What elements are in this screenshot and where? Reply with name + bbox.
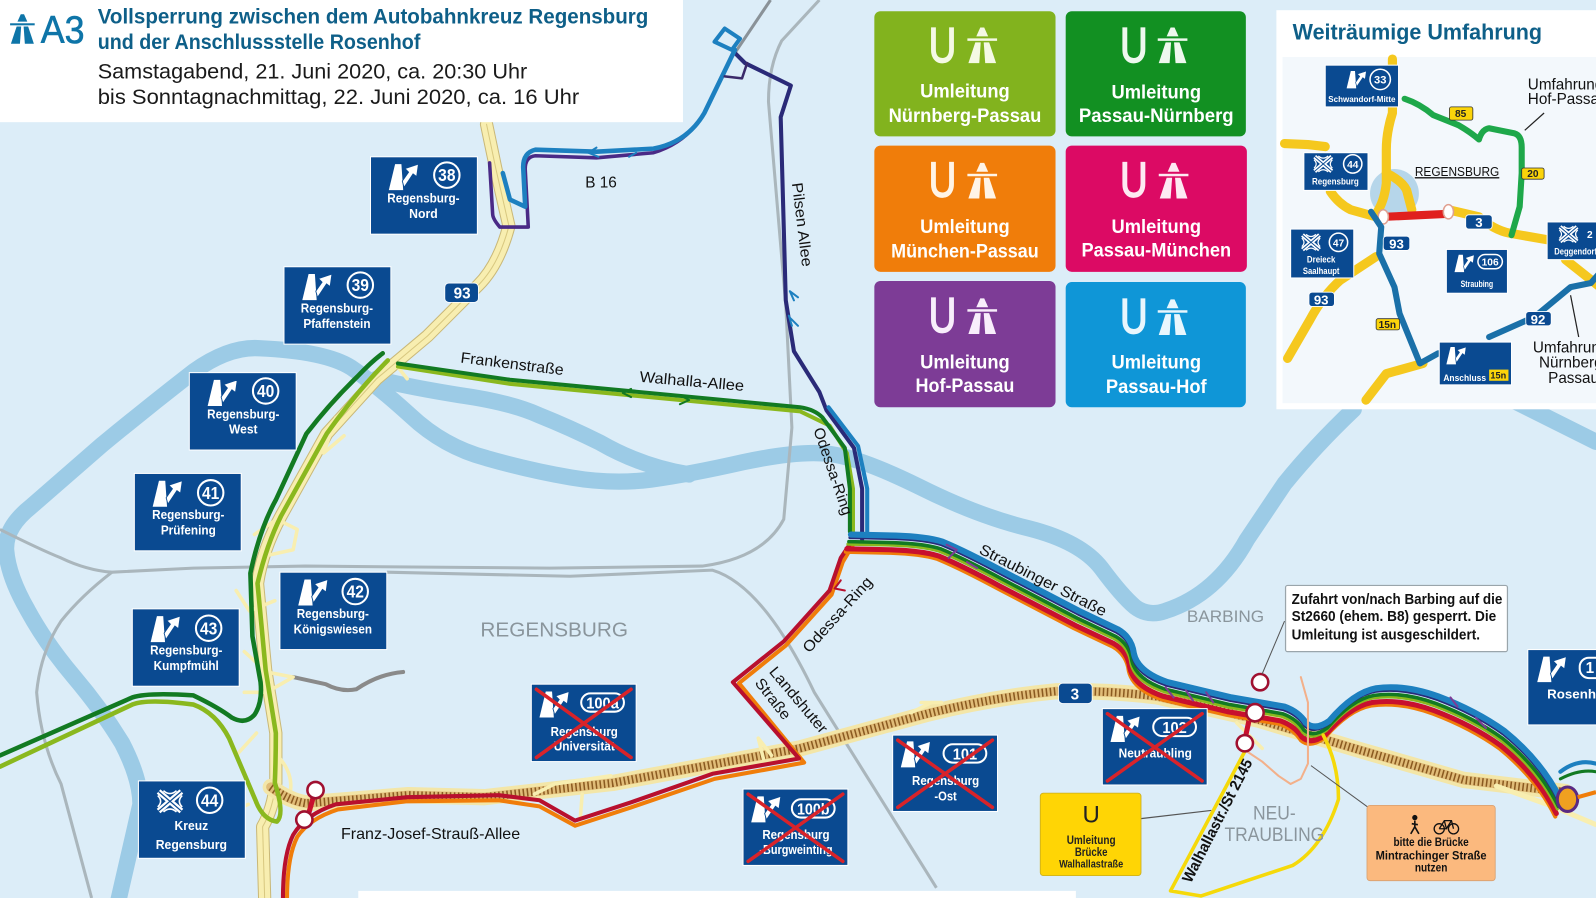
river Danube — [6, 348, 1596, 898]
route: Hof-Passau and Passau-Hof north section — [490, 29, 867, 540]
exit sign 39: Pfaffenstein — [303, 316, 370, 331]
interchange sign 44 — [138, 781, 245, 858]
closure markers — [296, 674, 1268, 828]
motorway shield 93 — [445, 283, 478, 302]
callout: Walhallastraße bridge detour: Walhallastraße — [1059, 858, 1123, 870]
route: München-Passau and Passau-München south section — [283, 543, 853, 898]
closed exit sign 100a: 100a — [586, 696, 619, 713]
motorway shield 93: 93 — [454, 285, 471, 302]
railway lines — [0, 0, 936, 898]
inset heading: Weiträumige Umfahrung — [1293, 20, 1542, 45]
inset sign 44: Regensburg — [1312, 176, 1359, 186]
callout: Walhallastraße bridge detour: U — [1082, 802, 1100, 829]
exit sign 38: 38 — [438, 165, 456, 185]
tile: Hof-Passau: Umleitung — [920, 352, 1010, 374]
tile: Passau-München: Passau-München — [1081, 240, 1231, 262]
city label Regensburg: REGENSBURG — [480, 619, 628, 641]
label Franz-Josef-Strauß-Allee: Franz-Josef-Strauß-Allee — [341, 826, 520, 843]
label Walhalla-Allee: Walhalla-Allee — [639, 369, 745, 395]
closed exit sign 100a — [531, 684, 636, 762]
inset sign 44: 44 — [1347, 160, 1359, 171]
callout: pedestrians and cyclists use Mintrachinger bridge — [1311, 766, 1495, 881]
exit sign 42: Regensburg- — [297, 606, 369, 621]
tile: Passau-Nürnberg: Umleitung — [1112, 82, 1201, 104]
town label Neutraubling — [1224, 803, 1324, 846]
exit sign 40 — [189, 373, 296, 450]
inset shields: 92 — [1531, 312, 1545, 327]
exit sign Rosenhof: Rosenh — [1547, 686, 1596, 701]
tile: München-Passau: Umleitung — [920, 216, 1010, 238]
tile: Nürnberg-Passau: U — [929, 19, 956, 73]
end of closure at Rosenhof — [1557, 787, 1596, 811]
exit sign 42: 42 — [347, 582, 364, 602]
inset sign 47 — [1291, 229, 1354, 278]
tile: Hof-Passau: U — [929, 289, 956, 343]
tile: Passau-Nürnberg: U — [1120, 19, 1148, 73]
motorway label A3: A3 — [41, 9, 84, 52]
callout: Barbing access closed — [1262, 585, 1507, 674]
tile: Hof-Passau — [874, 281, 1056, 407]
closed exit sign 100b — [743, 789, 848, 865]
label Walhallastr./St 2145: Walhallastr./St 2145 — [1179, 756, 1257, 886]
interchange sign 44: Regensburg — [156, 837, 227, 852]
closed exit sign 101 — [893, 735, 998, 811]
panel: wide-area detour inset — [1276, 10, 1596, 409]
route bundle along Straubinger Straße — [846, 535, 1596, 817]
inset shields: 93 — [1389, 236, 1404, 251]
inset roads — [1285, 59, 1596, 400]
label Odessa-Ring north: Odessa-Ring — [809, 425, 855, 518]
closed exit sign 101: 101 — [953, 747, 978, 764]
exit sign 40: Regensburg- — [207, 406, 279, 421]
tile: Passau-München: U — [1120, 153, 1148, 208]
inset shields: 20 — [1527, 169, 1539, 180]
bottom white strip — [358, 891, 1076, 898]
tile: Passau-Nürnberg — [1066, 11, 1246, 136]
Mintrachinger bridge path — [1247, 677, 1308, 784]
inset sign 44 — [1304, 153, 1368, 190]
inset shields: 93 — [1314, 292, 1329, 307]
callout: Walhallastraße bridge detour — [1040, 793, 1211, 876]
exit sign 41 — [134, 473, 241, 551]
exit sign 43 — [132, 609, 239, 686]
legend tiles — [874, 11, 1247, 407]
town label Barbing: BARBING — [1187, 608, 1264, 626]
inset sign Deggendorf: 2 — [1587, 230, 1593, 241]
inset shields — [1309, 107, 1551, 331]
inset sign Anschluss 15n: Anschluss — [1443, 373, 1486, 383]
town label Neutraubling: TRAUBLING — [1224, 824, 1324, 846]
motorway A93 — [229, 124, 509, 898]
interchange sign 44: 44 — [201, 790, 219, 810]
tile: Hof-Passau: Hof-Passau — [916, 375, 1014, 397]
inset sign 33: Schwandorf-Mitte — [1328, 95, 1396, 104]
street labels — [341, 174, 1257, 886]
callout: pedestrians and cyclists use Mintrachinger bridge: bitte die Brücke — [1393, 835, 1469, 849]
tile: Passau-Hof: Passau-Hof — [1106, 376, 1207, 398]
icon: bicycle — [1434, 821, 1459, 834]
closed exit sign 101: Regensburg — [912, 773, 979, 788]
inset sign 33: 33 — [1374, 74, 1386, 86]
exit sign 41: Prüfening — [161, 523, 216, 538]
closed exit sign 102: 102 — [1162, 720, 1187, 737]
exit sign 39 — [284, 267, 391, 344]
closure dates: Samstagabend, 21. Juni 2020, ca. 20:30 Uhr — [98, 59, 527, 83]
closed exit sign 102: Neutraubling — [1119, 745, 1192, 760]
closed exit sign 100a: Regensburg — [551, 724, 618, 739]
exit sign 41: Regensburg- — [152, 507, 224, 522]
inset shields: 85 — [1455, 109, 1467, 120]
label Straubinger Straße: Straubinger Straße — [976, 541, 1109, 620]
closed exit sign 102 — [1102, 709, 1207, 785]
inset sign 47: 47 — [1333, 238, 1344, 249]
closed exit sign 100b: 100b — [797, 802, 830, 819]
icon: autobahn — [10, 14, 35, 44]
motorway shield 3 — [1059, 683, 1092, 704]
interchange sign 44: Kreuz — [175, 818, 209, 833]
Walhallastraße ring road — [1171, 735, 1338, 896]
route: Nürnberg-Passau and Passau-Nürnberg west section — [0, 353, 853, 822]
exit sign 38: Nord — [409, 206, 438, 221]
inset sign 106: Straubing — [1461, 279, 1493, 289]
label Landshuter Straße: Landshuter — [765, 664, 831, 737]
exit sign 40: West — [229, 422, 258, 437]
closed exit sign 101: -Ost — [934, 788, 957, 803]
inset closure segment — [1378, 205, 1454, 224]
callout: Walhallastraße bridge detour: Brücke — [1075, 845, 1108, 859]
exit sign 42 — [280, 572, 387, 650]
exit sign 39: Regensburg- — [301, 301, 373, 316]
label B 16: B 16 — [585, 174, 617, 191]
callout: Barbing access closed: Zufahrt von/nach Barbing auf die — [1292, 592, 1502, 608]
inset sign Anschluss 15n — [1439, 342, 1512, 385]
tile: München-Passau — [874, 146, 1056, 272]
exit sign 39: 39 — [352, 275, 369, 295]
icon: pedestrian — [1411, 816, 1419, 834]
tile: München-Passau: U — [929, 153, 956, 208]
label Pilsen Allee: Pilsen Allee — [788, 182, 815, 268]
label Landshuter Straße: Straße — [751, 675, 794, 723]
inset label Regensburg: REGENSBURG — [1415, 164, 1499, 179]
tile: Passau-München — [1066, 146, 1247, 272]
header panel: und der Anschlussstelle Rosenhof — [98, 30, 421, 54]
label Frankenstraße: Frankenstraße — [460, 350, 565, 379]
exit sign Rosenhof — [1528, 650, 1596, 725]
exit sign Rosenhof: 1 — [1586, 660, 1595, 677]
inset sign 47: Dreieck — [1307, 255, 1336, 265]
heading: Vollsperrung zwischen dem Autobahnkreuz Regensburg — [98, 4, 648, 28]
tile: Passau-München: Umleitung — [1112, 216, 1201, 238]
motorway A3 with construction hatching — [271, 691, 1596, 825]
exit sign 43: Kumpfmühl — [154, 658, 219, 673]
motorway shield 3: 3 — [1071, 686, 1079, 703]
callout: Walhallastraße bridge detour: Umleitung — [1067, 833, 1116, 847]
tile: Passau-Hof: U — [1120, 290, 1148, 344]
exit sign 43: 43 — [200, 618, 217, 638]
inset label Umfahrung Hof-Passau — [1525, 77, 1596, 130]
inset sign Deggendorf — [1547, 222, 1596, 260]
header panel: bis Sonntagnachmittag, 22. Juni 2020, ca. 16 Uhr — [98, 85, 579, 109]
inset sign 47: Saalhaupt — [1303, 266, 1339, 276]
Regensburg area highlight — [1370, 169, 1419, 218]
local road — [293, 672, 403, 690]
tile: Passau-Nürnberg: Passau-Nürnberg — [1079, 105, 1234, 127]
exit sign 42: Königswiesen — [294, 621, 372, 636]
detour route Nürnberg-Passau — [1371, 212, 1596, 363]
exit sign 38 — [370, 157, 477, 234]
closed exit sign 100b: -Burgweinting — [759, 842, 833, 857]
exit sign 38: Regensburg- — [387, 191, 460, 206]
town label Neutraubling: NEU- — [1253, 803, 1296, 825]
exit sign 40: 40 — [257, 381, 274, 401]
tile: Passau-Hof: Umleitung — [1112, 352, 1201, 374]
callout: pedestrians and cyclists use Mintrachinger bridge: Mintrachinger Straße — [1376, 848, 1487, 862]
inset shields: 3 — [1475, 215, 1483, 230]
tile: Passau-Hof — [1066, 282, 1246, 407]
inset shields: 15n — [1379, 320, 1396, 331]
inset sign 33 — [1325, 65, 1399, 107]
header panel — [0, 0, 683, 122]
detour route Hof-Passau — [1405, 99, 1522, 235]
inset sign Anschluss 15n: 15n — [1490, 371, 1507, 381]
tile: Nürnberg-Passau: Nürnberg-Passau — [889, 105, 1041, 127]
inset sign 106: 106 — [1482, 258, 1499, 269]
callout: pedestrians and cyclists use Mintrachinger bridge: nutzen — [1415, 861, 1447, 875]
label Odessa-Ring south: Odessa-Ring — [800, 574, 876, 656]
inset label Umfahrung Nürnberg-Passau — [1533, 295, 1596, 387]
callout: Barbing access closed: Umleitung ist ausgeschildert. — [1292, 627, 1480, 643]
exit sign 41: 41 — [202, 483, 220, 503]
closed exit sign 100b: Regensburg — [762, 827, 830, 842]
tile: Nürnberg-Passau: Umleitung — [920, 81, 1010, 103]
inset sign 106 — [1446, 249, 1507, 293]
exit sign 43: Regensburg- — [150, 643, 222, 658]
tile: Nürnberg-Passau — [874, 11, 1056, 136]
callout: Barbing access closed: St2660 (ehem. B8) gesperrt. Die — [1292, 609, 1496, 625]
tile: München-Passau: München-Passau — [891, 241, 1039, 263]
closed exit sign 100a: Universität — [554, 738, 615, 753]
